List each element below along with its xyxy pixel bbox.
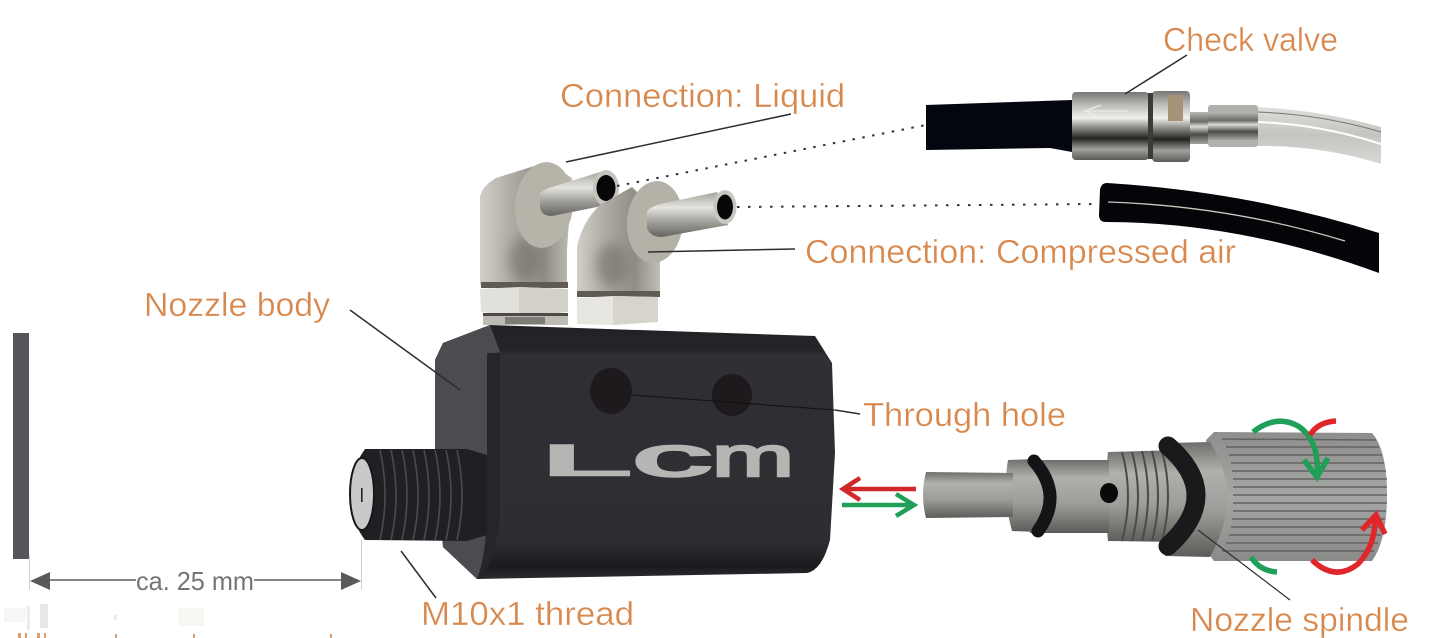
flange	[511, 159, 577, 251]
valve body	[1072, 91, 1190, 162]
hex nut	[480, 287, 568, 325]
M10x1 threaded stud	[350, 449, 487, 541]
scale bar: dark vertical reference plate	[13, 333, 29, 559]
label: Check valve: Check valve	[1163, 21, 1338, 58]
collar	[1165, 442, 1227, 557]
through hole left	[590, 368, 632, 414]
hose barb	[540, 172, 612, 216]
shoulder	[1006, 459, 1044, 532]
knurled knob	[1206, 432, 1387, 561]
chamfered left face	[435, 325, 500, 579]
LCM logo: c	[632, 425, 712, 488]
faint residual artefacts at bottom left	[4, 604, 332, 638]
LCM logo: L	[541, 437, 631, 485]
label: Connection: Compressed air: Connection: Compressed air	[805, 233, 1236, 270]
tip	[923, 472, 1013, 518]
transparent tube	[1255, 107, 1381, 164]
LCM logo	[541, 425, 794, 488]
arrow: loosen direction (red)	[1310, 421, 1385, 572]
label: Nozzle spindle: Nozzle spindle	[1190, 601, 1409, 638]
flange	[624, 179, 686, 265]
shaft	[1030, 460, 1109, 533]
fitting: compressed air connection	[577, 179, 736, 325]
housing	[435, 325, 835, 579]
LCM logo: m	[712, 425, 794, 488]
upper hose with check valve	[926, 91, 1381, 164]
through hole right	[712, 374, 752, 416]
flow arrow engraving	[1085, 105, 1128, 116]
dotted link: liquid port to check valve hose	[617, 125, 926, 186]
arrow: spindle insert (green) and remove (red)	[842, 478, 916, 516]
dimension: ca. 25 mm: ca. 25 mm	[136, 566, 254, 596]
small o-ring	[1034, 461, 1050, 531]
barb opening	[714, 190, 736, 224]
elbow body	[480, 162, 572, 285]
large o-ring	[1168, 446, 1196, 546]
nozzle spindle	[923, 432, 1387, 561]
leader lines	[350, 55, 1290, 600]
hex nut	[577, 296, 658, 325]
arrow: tighten direction (green)	[1251, 421, 1328, 572]
brass connector	[1190, 105, 1258, 147]
thread	[1106, 450, 1195, 542]
barb opening	[593, 170, 619, 206]
lower black compressed-air hose	[1099, 183, 1379, 273]
label: Nozzle body: Nozzle body	[144, 286, 330, 323]
stud tip face	[350, 458, 374, 530]
nozzle body	[435, 325, 835, 579]
fitting: liquid connection	[480, 159, 619, 325]
label: Connection: Liquid: Connection: Liquid	[560, 77, 845, 114]
dimension: ca. 25 mm	[30, 540, 362, 596]
elbow body	[577, 187, 660, 293]
dotted link: air port to black hose	[737, 204, 1100, 207]
label: M10x1 thread: M10x1 thread	[421, 595, 634, 632]
cross bore	[1100, 483, 1118, 503]
hose barb	[647, 192, 728, 237]
label: Through hole: Through hole	[863, 396, 1066, 433]
black hose	[926, 100, 1072, 152]
